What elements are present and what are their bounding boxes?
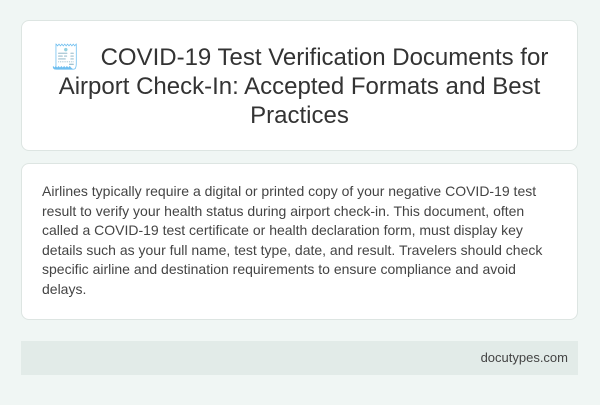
text block: Airlines typically require a digital or printed copy of your negative COVID-19 test result to verify your health status during airport check-in. This document, often called a COVID-19 test certificate or health declaration form, must display key details such as your full name, test type, date, and result. Travelers should check specific airline and destination requirements to ensure compliance and avoid delays.: [42, 183, 542, 297]
footer text: docutypes.com: [481, 350, 568, 365]
footer: [21, 341, 578, 375]
title: 🧾 COVID-19 Test Verification Documents for Airport Check-In: Accepted Formats and Best Practices: [51, 44, 548, 129]
panel: title card: [21, 20, 578, 151]
panel: description: [21, 163, 578, 320]
